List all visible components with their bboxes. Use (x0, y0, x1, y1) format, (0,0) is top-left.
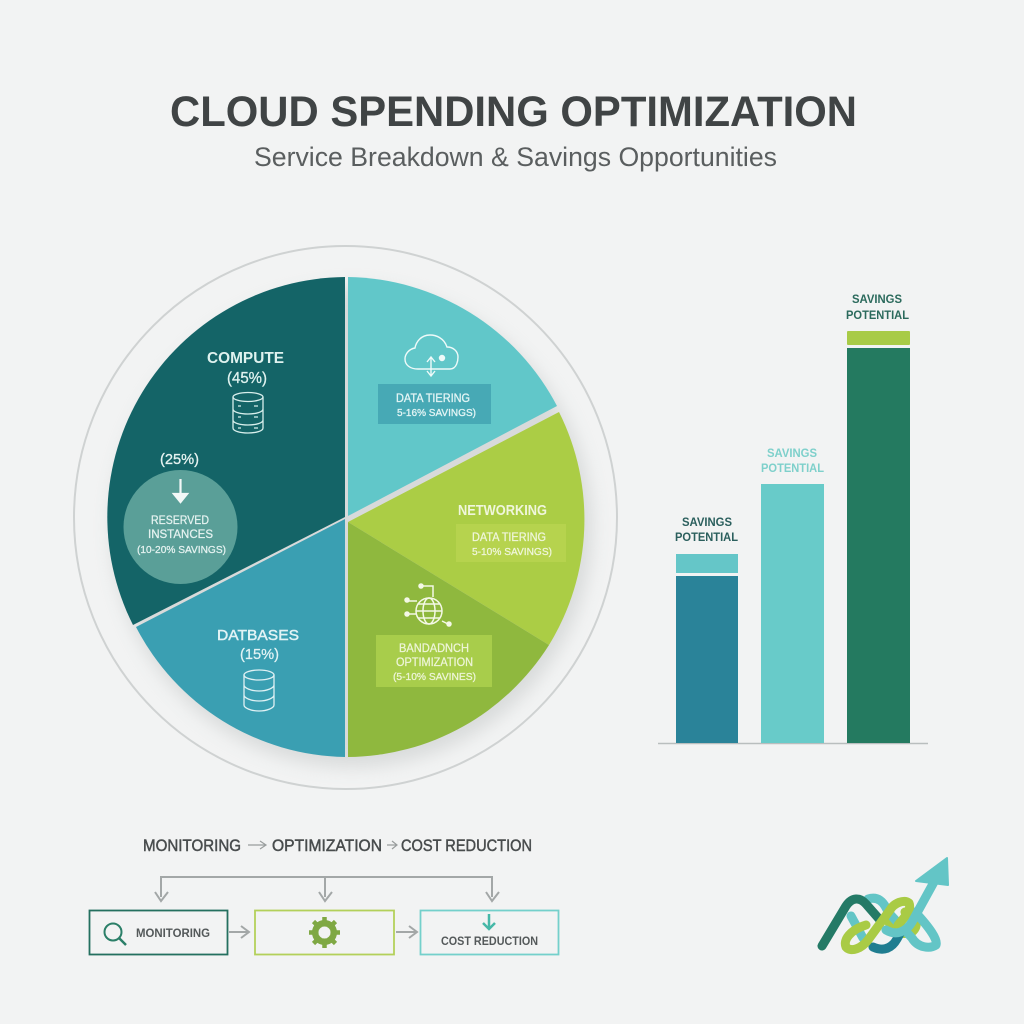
icon: magnifier (104, 924, 126, 945)
logo: chain growth arrow (822, 858, 948, 950)
bar 1: SAVINGS (682, 515, 732, 529)
databases label: (15%) (240, 646, 279, 663)
bar 2: SAVINGS (767, 446, 817, 460)
process heading: MONITORING (143, 836, 241, 855)
reserved instances callout (124, 451, 238, 584)
connector arrows (155, 877, 499, 938)
databases label: DATBASES (217, 627, 299, 644)
reserved instances callout: (10-20% SAVINGS) (137, 544, 226, 556)
data tiering callout: 5-16% SAVINGS) (397, 407, 476, 419)
icon: down arrow (174, 479, 187, 502)
databases label (217, 627, 299, 663)
cost reduction box (420, 910, 558, 954)
process heading: COST REDUCTION (401, 836, 532, 855)
segment: databases (136, 519, 345, 757)
networking callout: 5-10% SAVINGS) (472, 546, 552, 558)
bar chart (658, 292, 928, 744)
process heading: OPTIMIZATION (272, 836, 382, 855)
bar 3: POTENTIAL (846, 308, 909, 322)
bandwidth callout: OPTIMIZATION (396, 655, 473, 669)
bar 3 (846, 292, 910, 743)
axis (658, 742, 928, 744)
bar 3: SAVINGS (852, 292, 902, 306)
segment: networking (348, 412, 584, 645)
icon: globe network (405, 584, 451, 626)
monitoring box: MONITORING (136, 926, 210, 940)
networking label: NETWORKING (458, 503, 547, 519)
icon: compute server (233, 392, 263, 433)
bar 1: POTENTIAL (675, 530, 738, 544)
bandwidth callout: (5-10% SAVINES) (393, 671, 476, 683)
bar 1 (675, 515, 738, 743)
bar 2 (761, 446, 824, 743)
reserved instances callout: (25%) (160, 451, 199, 468)
reserved instances callout: RESERVED (151, 513, 209, 527)
compute label: COMPUTE (207, 350, 284, 367)
icon: down arrow (483, 914, 495, 929)
reserved instances callout: INSTANCES (148, 527, 213, 541)
segment: compute (107, 277, 345, 625)
data tiering callout (378, 384, 491, 424)
icon: database (244, 670, 274, 711)
segment: bandwidth (348, 522, 549, 757)
segment: data tiering (348, 277, 557, 516)
pie chart (74, 246, 617, 789)
compute label (207, 350, 284, 387)
bar 2: POTENTIAL (761, 461, 824, 475)
cost reduction box: COST REDUCTION (441, 934, 538, 948)
icon: gear (309, 917, 340, 948)
process heading (143, 836, 532, 855)
bandwidth callout (376, 635, 492, 687)
optimization box (255, 910, 394, 954)
title: CLOUD SPENDING OPTIMIZATION (170, 88, 857, 136)
icon: cloud (405, 335, 458, 376)
subtitle: Service Breakdown & Savings Opportunities (254, 142, 777, 172)
bandwidth callout: BANDADNCH (399, 641, 469, 655)
networking callout: DATA TIERING (472, 530, 546, 544)
monitoring box (90, 910, 228, 954)
data tiering callout: DATA TIERING (396, 391, 470, 405)
compute label: (45%) (227, 370, 267, 387)
networking callout (456, 524, 566, 562)
